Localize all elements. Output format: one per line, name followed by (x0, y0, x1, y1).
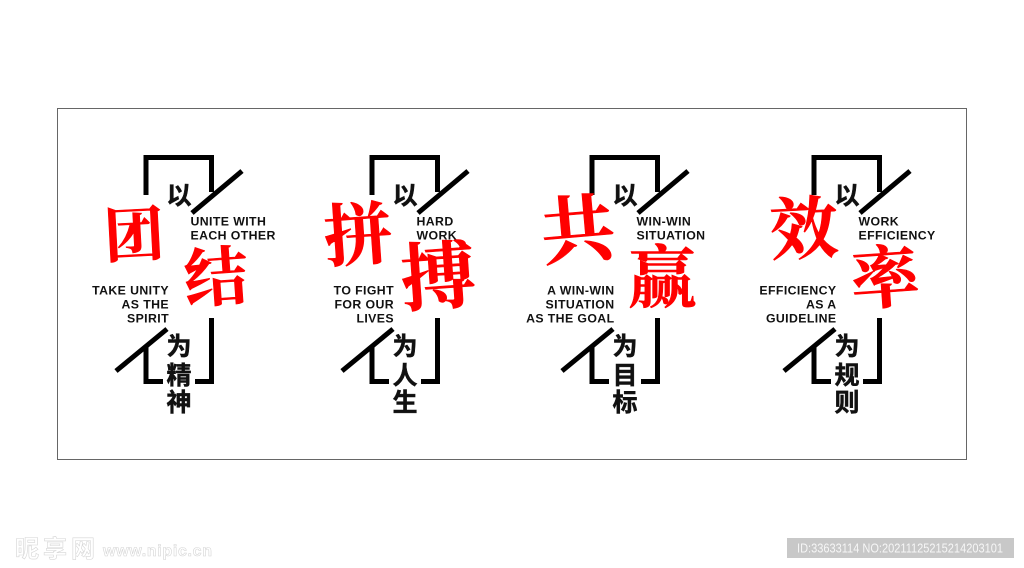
frame lines (784, 158, 910, 382)
red character: bo: 搏 (397, 217, 478, 327)
red character: ying: 赢 (628, 225, 696, 322)
label: yi: 以 (392, 176, 418, 212)
english text: win-win: SITUATION (636, 228, 705, 242)
label: wei ren sheng: 为 (392, 327, 418, 363)
english text: to fight: LIVES (356, 312, 394, 326)
english text: to fight: TO FIGHT (334, 284, 394, 298)
label: wei gui ze: 为 (834, 327, 860, 363)
red character: lv: 率 (847, 223, 923, 324)
label: wei jing shen: 神 (166, 383, 192, 419)
watermark (15, 529, 212, 564)
panel: efficiency (759, 158, 936, 419)
label: yi: 以 (834, 176, 860, 212)
label: wei mu biao: 为 (612, 327, 638, 363)
frame lines (562, 158, 688, 382)
label: wei mu biao: 目 (612, 356, 638, 392)
label: wei gui ze: 则 (834, 383, 860, 419)
english text: hard work: HARD (416, 214, 454, 228)
english text: a win-win: SITUATION (546, 298, 614, 312)
panel: win-win (526, 158, 705, 419)
red character: jie: 结 (181, 225, 251, 321)
english text: efficiency guideline: AS A (806, 298, 836, 312)
frame lines (116, 158, 242, 382)
english text: unite: EACH OTHER (190, 228, 276, 242)
english text: efficiency guideline: GUIDELINE (766, 312, 836, 326)
id stamp: ID:33633114 NO:20211125215214203101 (797, 542, 1003, 556)
english text: take unity: SPIRIT (127, 312, 169, 326)
id stamp (787, 538, 1014, 558)
english text: unite: UNITE WITH (190, 214, 266, 228)
red character: pin: 拼 (320, 180, 395, 281)
red character: gong: 共 (536, 169, 621, 281)
label: wei jing shen: 精 (166, 356, 192, 392)
frame lines (342, 158, 468, 382)
english text: work efficiency: WORK (858, 214, 899, 228)
watermark: 昵享网 (15, 529, 95, 564)
english text: efficiency guideline: EFFICIENCY (759, 284, 836, 298)
panel: hard work (320, 158, 478, 419)
main border panel (58, 108, 966, 460)
label: wei mu biao: 标 (612, 383, 638, 419)
panel: unity (92, 158, 276, 419)
label: yi: 以 (166, 176, 192, 212)
english text: take unity: AS THE (122, 298, 169, 312)
label: wei ren sheng: 生 (392, 383, 418, 419)
red character: xiao: 效 (767, 174, 840, 275)
english text: take unity: TAKE UNITY (92, 284, 169, 298)
label: wei gui ze: 规 (834, 356, 860, 392)
watermark: www.nipic.cn (102, 543, 212, 560)
label: wei ren sheng: 人 (392, 356, 418, 392)
english text: hard work: WORK (416, 228, 457, 242)
label: yi: 以 (612, 176, 638, 212)
english text: to fight: FOR OUR (334, 298, 394, 312)
label: wei jing shen: 为 (166, 327, 192, 363)
red character: tuan: 团 (102, 186, 166, 276)
english text: work efficiency: EFFICIENCY (858, 228, 936, 242)
english text: a win-win: AS THE GOAL (526, 312, 615, 326)
english text: win-win: WIN-WIN (636, 214, 691, 228)
english text: a win-win: A WIN-WIN (547, 284, 614, 298)
